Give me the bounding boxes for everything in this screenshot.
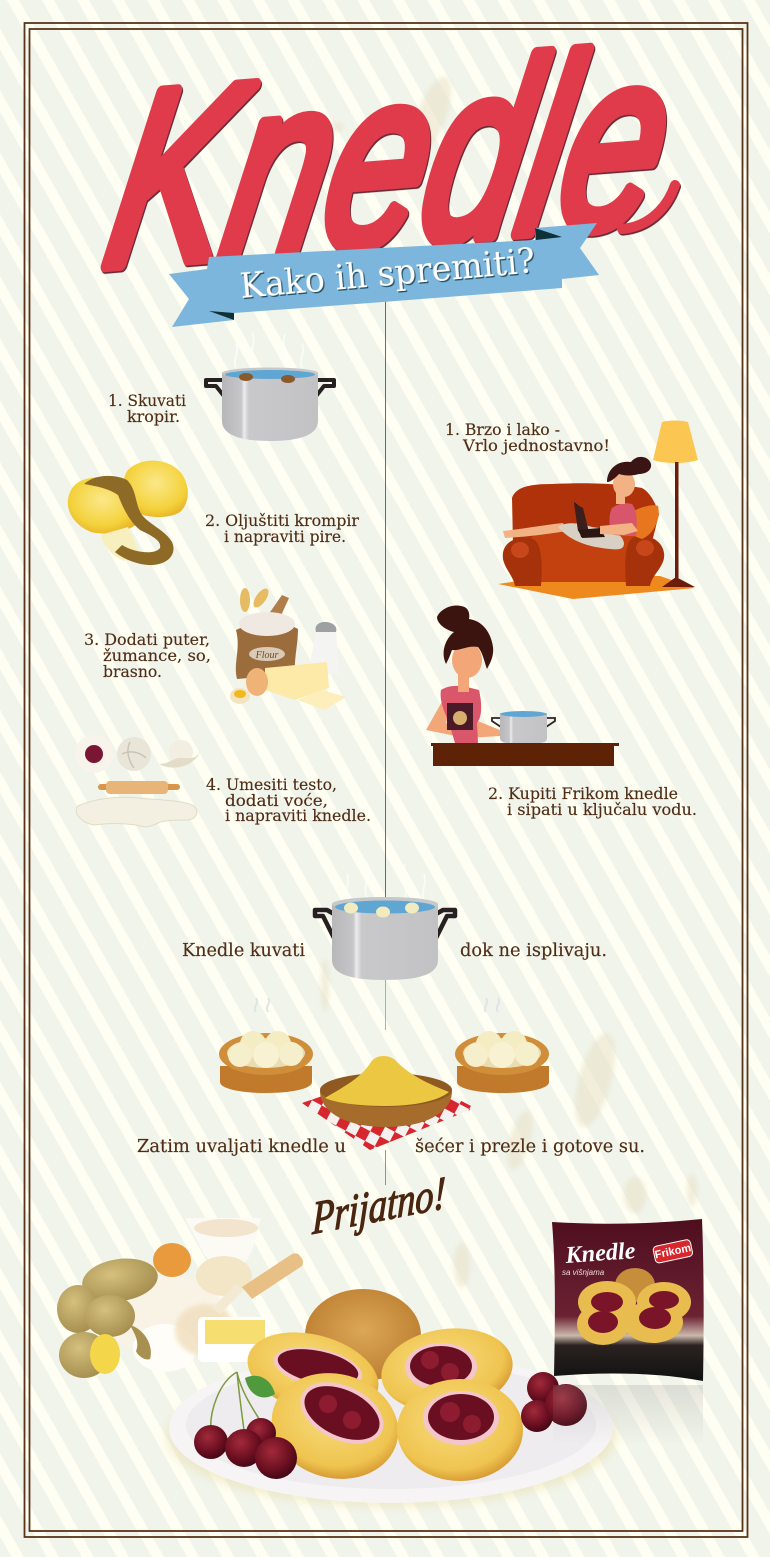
text: dok ne isplivaju: dok ne isplivaju. — [460, 941, 607, 961]
ribbon text: Kako ih spremiti? — [238, 241, 537, 307]
salt shaker — [308, 632, 340, 675]
packet dumplings — [615, 1268, 655, 1302]
table — [431, 743, 619, 746]
text: Knedle kuvati: Knedle kuvati — [182, 941, 305, 961]
torso — [610, 503, 637, 536]
tail of final e — [622, 185, 675, 229]
step 4 text: Umesiti testo: i napraviti knedle. — [225, 806, 371, 825]
text: secer i prezle i gotove su: šećer i prezle i gotove su. — [415, 1137, 645, 1157]
packet title: Knedle — [564, 1238, 637, 1269]
steam — [235, 332, 303, 368]
pillow — [626, 505, 659, 539]
right step 2 text: Kupiti Frikom knedle — [488, 784, 697, 819]
steam — [346, 862, 425, 900]
torso — [441, 686, 481, 743]
cherries left — [211, 1372, 261, 1438]
back breaded dumpling — [305, 1289, 421, 1381]
rug — [498, 576, 695, 599]
right step 1 text: Brzo i lako: Vrlo jednostavno! — [462, 436, 610, 455]
dumpling C — [260, 1359, 410, 1493]
right step 2 text: Kupiti Frikom knedle: 2. Kupiti Frikom knedle — [488, 784, 678, 803]
flour label — [249, 647, 285, 661]
right step 1 text: Brzo i lako: 1. Brzo i lako - — [445, 420, 560, 439]
icon: left basket of dumplings — [219, 1031, 313, 1093]
woman legs — [503, 523, 567, 538]
dough — [76, 797, 197, 827]
text: Zatim uvaljati knedle u: Zatim uvaljati knedle u — [137, 1137, 346, 1157]
head and hair — [616, 490, 625, 504]
ribbon fold left — [209, 311, 234, 320]
photo: plate of cherry dumplings — [167, 1289, 615, 1506]
centre divider line — [384, 298, 386, 1185]
step 4 text: Umesiti testo: 4. Umesiti testo, — [206, 775, 337, 794]
step 3 text: Dodati puter: žumance, so, — [103, 646, 211, 665]
lamp — [653, 420, 698, 463]
dumpling D — [397, 1379, 523, 1481]
sofa — [512, 483, 659, 544]
plate shadow — [167, 1366, 615, 1506]
icon: bowl of breadcrumbs on checked cloth — [302, 1056, 475, 1150]
right step 2 text: Kupiti Frikom knedle: i sipati u ključalu vodu. — [507, 800, 697, 819]
butter dish — [198, 1317, 270, 1362]
illustration: woman on sofa with laptop — [498, 420, 698, 599]
arms — [426, 700, 461, 736]
icon: dumplings, rolling pin and dough — [75, 735, 200, 827]
step 4 text: Umesiti testo: dodati voće, — [225, 791, 328, 810]
small pot — [492, 718, 555, 727]
jug — [185, 1218, 261, 1270]
potato peel — [84, 476, 173, 565]
step 1 text: Skuvati krompir: 1. Skuvati — [108, 391, 186, 410]
illustration: woman cooking at table — [426, 605, 619, 766]
hair — [437, 605, 493, 669]
ribbon shape — [169, 223, 599, 327]
icon: flour sack, salt, egg and butter — [230, 586, 346, 710]
packet subtitle: sa višnjama — [562, 1268, 605, 1277]
potatoes — [79, 1254, 161, 1306]
butter — [265, 662, 329, 700]
neck and head — [458, 672, 469, 692]
icon: boiling pot with potatoes — [206, 332, 334, 441]
step 2 text: Oljustiti krompir: i napraviti pire. — [224, 527, 346, 546]
step 3 text: Dodati puter: 3. Dodati puter, — [84, 630, 210, 649]
handles — [315, 910, 455, 938]
icon: boiling pot with dumplings — [315, 862, 455, 980]
packet in hand — [447, 703, 473, 730]
step 1 text: Skuvati krompir: kropir. — [127, 407, 180, 426]
dumpling A — [238, 1319, 388, 1427]
spoon — [242, 1253, 303, 1299]
plate — [169, 1353, 613, 1503]
step 4 text: Umesiti testo — [206, 775, 371, 825]
step 1 text: Skuvati krompir — [108, 391, 186, 426]
product packet: Frikom knedle — [552, 1219, 704, 1445]
ribbon banner — [169, 223, 599, 327]
egg — [153, 1243, 191, 1277]
icon: right basket of dumplings — [455, 1031, 549, 1093]
bag — [552, 1219, 704, 1381]
step 3 text: Dodati puter — [84, 630, 211, 681]
reflection — [553, 1385, 703, 1445]
paper stains — [295, 73, 697, 1287]
laptop — [574, 502, 605, 537]
egg — [246, 668, 268, 696]
handwritten: Prijatno!: Prijatno! — [311, 1168, 446, 1245]
dumpling B — [376, 1320, 518, 1420]
right step 1 text: Brzo i lako — [445, 420, 610, 455]
handles — [206, 380, 334, 400]
flour heap and board — [103, 1275, 227, 1355]
steam above baskets — [255, 998, 499, 1012]
step 2 text: Oljustiti krompir: 2. Oljuštiti krompir — [205, 511, 359, 530]
step 2 text: Oljustiti krompir — [205, 511, 359, 546]
step 3 text: Dodati puter: brasno. — [103, 662, 162, 681]
frikom logo: Frikom — [654, 1242, 692, 1261]
icon: peeled potatoes — [68, 461, 188, 565]
ribbon fold right — [535, 228, 562, 240]
wheat — [240, 586, 271, 612]
photo: ingredients group — [57, 1218, 303, 1378]
cherries right — [527, 1372, 559, 1404]
icon: flour sack, salt, egg and butter: Flour — [255, 650, 278, 661]
crumbs — [196, 1256, 252, 1296]
rolling pin — [98, 784, 180, 790]
